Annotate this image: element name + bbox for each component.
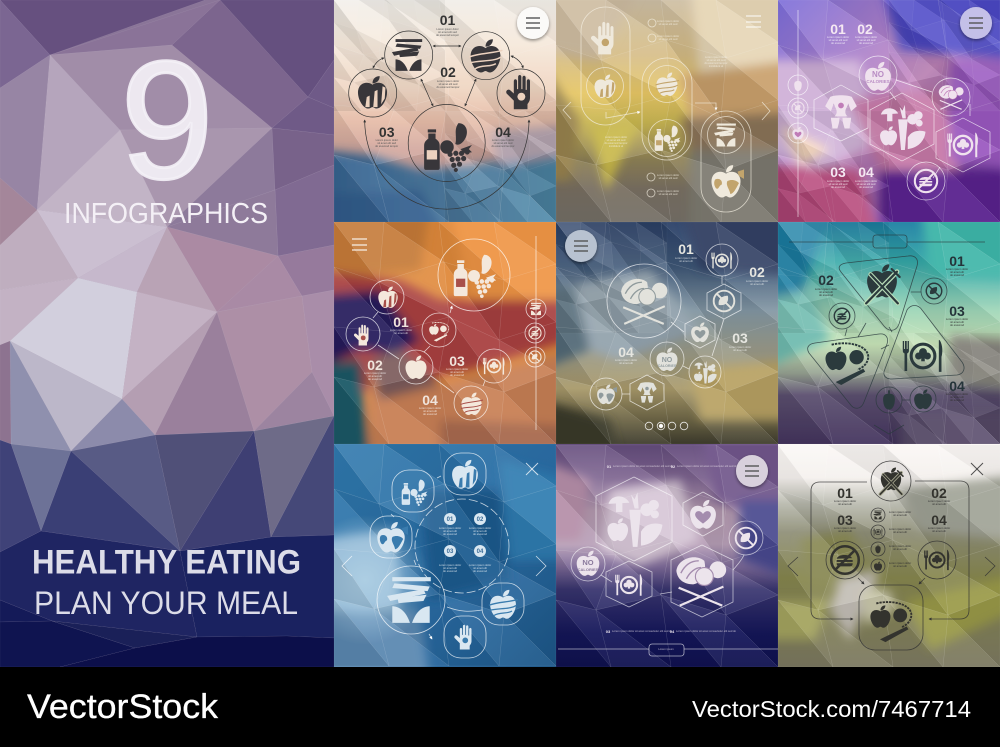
micro text: sit amet elit <box>619 361 633 365</box>
no calories label: CALORIES <box>578 567 599 572</box>
panel 4: orange and navy network diagram <box>334 222 556 444</box>
micro text: Lorem ipsum dolor sit amet consectetur elit sed do <box>613 464 674 468</box>
panel 8: purple and navy hexagon diagram <box>556 444 778 667</box>
node circles and connectors <box>346 236 546 430</box>
number badges: 02 <box>477 517 484 523</box>
micro text: Lorem ipsum dolor <box>855 179 877 183</box>
menu icon <box>746 16 761 27</box>
no calories label <box>866 70 890 84</box>
micro text: Lorem ipsum dolor <box>834 526 856 530</box>
heading: plan your meal: PLAN YOUR MEAL <box>34 585 298 621</box>
numbers: 01 <box>440 12 455 28</box>
panel 5: slate and tan diagram with pagination <box>556 222 778 444</box>
numbers: 04 <box>931 512 947 528</box>
micro text: Lorem ipsum dolor <box>946 392 968 396</box>
micro text: sit amet elit sed <box>659 37 678 41</box>
numbers: 03 <box>949 303 965 319</box>
micro text: Lorem ipsum dolor <box>834 499 856 503</box>
micro text blocks: Lorem ipsum dolor <box>436 27 459 31</box>
number badges <box>444 513 486 557</box>
diagram connectors <box>365 46 529 209</box>
no calories label: CALORIES <box>866 79 890 84</box>
numbers: 01 <box>678 241 694 257</box>
no calories label: CALORIES <box>658 364 677 368</box>
no calories label: NO <box>582 558 594 567</box>
micro text: do eiusmod tempor <box>704 61 728 65</box>
connecting shapes <box>788 10 990 217</box>
micro text: Lorem ipsum dolor <box>889 510 911 514</box>
micro text: sit amet elit <box>950 395 964 399</box>
frame and nodes <box>788 461 995 650</box>
micro text: do eiusmod <box>859 41 873 45</box>
numbers: 02 <box>440 64 456 80</box>
micro text: do eiusmod <box>473 569 487 573</box>
micro text: Lorem ipsum dolor <box>827 35 849 39</box>
micro text: sit amet elit <box>443 566 457 570</box>
row labels: 01 <box>607 464 612 469</box>
panel 1: light peach and blue radial diagram <box>334 0 556 222</box>
micro text <box>612 464 738 651</box>
micro text blocks: do eiusmod tempor <box>375 144 398 148</box>
micro text: Lorem ipsum dolor <box>746 279 768 283</box>
micro text: sit amet elit sed <box>829 182 848 186</box>
micro text: Lorem ipsum dolor <box>469 563 491 567</box>
micro text: Lorem ipsum dolor <box>615 358 637 362</box>
micro text: Lorem ipsum dolor <box>364 371 386 375</box>
micro text: sit amet elit <box>950 270 964 274</box>
image url: VectorStock.com/7467714 <box>692 696 971 722</box>
micro text: do eiusmod <box>859 185 873 189</box>
micro text blocks: do eiusmod tempor <box>436 33 459 37</box>
panel 2: golden yellow pill diagram <box>556 0 778 222</box>
micro text <box>604 19 728 196</box>
top bar, rounded triangles and nodes <box>789 235 985 434</box>
micro text: Lorem ipsum dolor <box>729 345 751 349</box>
icons <box>597 252 734 404</box>
micro text: Lorem ipsum dolor <box>815 287 837 291</box>
icons <box>591 22 744 198</box>
micro text <box>364 328 468 416</box>
menu button <box>736 455 768 487</box>
micro text: do eiusmod <box>443 532 457 536</box>
no calories label: NO <box>872 70 884 79</box>
no calories label: NO <box>662 357 673 364</box>
micro text: Lorem ipsum dolor <box>657 34 679 38</box>
micro text: sit amet elit <box>679 259 693 263</box>
micro text: Lorem ipsum dolor <box>657 173 679 177</box>
micro text: do eiusmod <box>819 293 833 297</box>
panel 9: white and olive framed diagram <box>778 444 1000 667</box>
micro text <box>439 526 491 573</box>
micro text: Lorem ipsum dolor <box>675 256 697 260</box>
micro text <box>815 267 968 402</box>
micro text: sit amet elit <box>750 282 764 286</box>
micro text: Lorem ipsum dolor <box>439 563 461 567</box>
row labels: 02 <box>671 464 676 469</box>
numbers <box>379 12 511 140</box>
micro text: sit amet elit <box>838 529 852 533</box>
pagination dots <box>645 422 688 430</box>
micro text: sit amet elit sed <box>659 192 678 196</box>
menu icon <box>352 239 367 250</box>
numbers: 03 <box>732 330 748 346</box>
micro text: Lorem ipsum dolor <box>946 267 968 271</box>
micro text: Lorem ipsum dolor <box>605 135 627 139</box>
micro text blocks <box>375 27 515 148</box>
icons <box>354 255 541 415</box>
micro text: incididunt ut <box>609 144 623 148</box>
micro text <box>827 35 877 189</box>
micro text blocks: Lorem ipsum dolor <box>376 138 398 142</box>
micro text: incididunt ut <box>709 64 723 68</box>
micro text blocks: Lorem ipsum dolor <box>492 138 514 142</box>
nodes <box>590 244 741 410</box>
micro text: sit amet elit <box>819 290 833 294</box>
numbers: 01 <box>949 253 965 269</box>
micro text blocks: sit amet elit sed <box>438 30 457 34</box>
micro text: sit amet elit <box>893 547 907 551</box>
micro text: sit amet elit <box>893 564 907 568</box>
number badges: 01 <box>447 517 454 523</box>
numbers: 01 <box>837 485 853 501</box>
micro text: sit amet elit sed <box>607 138 626 142</box>
no calories label <box>658 357 677 368</box>
micro text: do eiusmod <box>950 273 964 277</box>
micro text: do eiusmod tempor <box>604 141 628 145</box>
numbers: 03 <box>830 164 846 180</box>
numbers: 03 <box>449 353 465 369</box>
numbers: 02 <box>749 264 765 280</box>
big number 9: 9 <box>120 26 214 214</box>
micro text: do eiusmod <box>950 398 964 402</box>
micro text: sit amet elit <box>838 502 852 506</box>
nodes and lines <box>558 477 778 656</box>
icons <box>577 492 756 606</box>
micro text: sit amet elit <box>932 502 946 506</box>
icon row <box>358 39 530 172</box>
subtitle: infographics: INFOGRAPHICS <box>64 198 268 230</box>
numbers: 03 <box>837 512 853 528</box>
pills and circles <box>563 7 770 212</box>
footer watermark bar <box>0 667 1000 747</box>
micro text: sit amet elit <box>733 348 747 352</box>
micro text: Lorem ipsum dolor <box>928 526 950 530</box>
icons <box>826 264 942 410</box>
row labels: 04 <box>670 629 675 634</box>
micro text: sit amet elit sed <box>659 176 678 180</box>
panel 7: blue circular diagram <box>334 444 556 667</box>
micro text: sit amet elit sed <box>659 22 678 26</box>
micro text blocks: do eiusmod tempor <box>491 144 515 148</box>
micro text: Lorem ipsum dolor <box>889 527 911 531</box>
numbers: 04 <box>422 392 438 408</box>
numbers: 01 <box>830 21 846 37</box>
numbers: 01 <box>393 314 409 330</box>
micro text: Lorem ipsum dolor <box>889 561 911 565</box>
micro text: sit amet elit <box>893 513 907 517</box>
micro text: sit amet elit <box>450 370 464 374</box>
micro text: sit amet elit <box>443 529 457 533</box>
micro text: Lorem ipsum dolor <box>419 406 441 410</box>
heading: healthy eating: HEALTHY EATING <box>32 544 301 582</box>
micro text: Lorem ipsum dolor sit amet consectetur elit sed do <box>612 629 673 633</box>
micro text: do eiusmod <box>368 377 382 381</box>
micro text: Lorem ipsum dolor <box>657 189 679 193</box>
icons <box>831 468 949 642</box>
micro text: do eiusmod <box>831 41 845 45</box>
micro text <box>834 499 950 568</box>
menu button <box>960 7 992 39</box>
micro text: Lorem ipsum <box>658 647 675 651</box>
micro text: sit amet elit <box>893 530 907 534</box>
node: apple <box>349 31 545 182</box>
menu button <box>565 230 597 262</box>
numbers: 03 <box>379 124 395 140</box>
micro text: sit amet elit <box>473 529 487 533</box>
numbers <box>837 485 947 528</box>
numbers: 02 <box>931 485 947 501</box>
micro text: Lorem ipsum dolor sit amet consectetur elit sed do <box>677 464 738 468</box>
micro text <box>615 256 768 365</box>
numbers: 04 <box>858 164 874 180</box>
no calories label <box>578 558 599 572</box>
micro text: Lorem ipsum dolor <box>889 544 911 548</box>
micro text: do eiusmod <box>423 412 437 416</box>
micro text: sit amet elit sed <box>707 58 726 62</box>
micro text: sit amet elit <box>950 320 964 324</box>
micro text: sit amet elit sed <box>829 38 848 42</box>
micro text: sit amet elit <box>473 566 487 570</box>
micro text: Lorem ipsum dolor <box>855 35 877 39</box>
micro text blocks: sit amet elit sed <box>494 141 513 145</box>
micro text: sit amet elit sed <box>857 38 876 42</box>
numbers <box>367 314 465 408</box>
menu button <box>517 7 549 39</box>
micro text: sit amet elit <box>932 529 946 533</box>
micro text blocks: sit amet elit sed <box>377 141 397 145</box>
micro text: Lorem ipsum dolor <box>827 179 849 183</box>
micro text: Lorem ipsum dolor sit amet consectetur elit sed do <box>676 629 737 633</box>
micro text blocks: sit amet elit sed <box>439 82 458 86</box>
micro text blocks: Lorem ipsum dolor <box>437 79 459 83</box>
micro text: Lorem ipsum dolor <box>446 367 468 371</box>
brand name: VectorStock <box>27 688 219 726</box>
rings and connectors <box>342 453 546 658</box>
row labels: 03 <box>606 629 611 634</box>
micro text: Lorem ipsum dolor <box>928 499 950 503</box>
micro text blocks: do eiusmod tempor <box>436 85 460 89</box>
micro text: do eiusmod <box>473 532 487 536</box>
number badges: 03 <box>447 549 454 555</box>
micro text: sit amet elit sed <box>857 182 876 186</box>
micro text: do eiusmod <box>950 323 964 327</box>
micro text: Lorem ipsum dolor <box>657 19 679 23</box>
number badges: 04 <box>477 549 484 555</box>
micro text: Lorem ipsum dolor <box>390 328 412 332</box>
panel 3: violet and pink hexagon diagram <box>778 0 1000 222</box>
micro text: do eiusmod <box>443 569 457 573</box>
numbers: 04 <box>618 344 634 360</box>
micro text: Lorem ipsum dolor <box>705 55 727 59</box>
numbers <box>618 241 765 360</box>
micro text: Lorem ipsum dolor <box>439 526 461 530</box>
panel 6: teal and purple triangle diagram <box>778 222 1000 444</box>
icons <box>792 62 978 192</box>
numbers: 02 <box>857 21 873 37</box>
micro text: Lorem ipsum dolor <box>946 317 968 321</box>
micro text: do eiusmod <box>450 373 464 377</box>
micro text: sit amet elit <box>394 331 408 335</box>
micro text: sit amet elit <box>368 374 382 378</box>
numbers: 04 <box>949 378 965 394</box>
numbers <box>818 253 965 394</box>
micro text: sit amet elit <box>423 409 437 413</box>
row labels <box>606 464 676 634</box>
panel: cover with title <box>0 0 334 667</box>
polygon background <box>0 0 334 667</box>
icons <box>377 460 518 649</box>
micro text: Lorem ipsum dolor <box>469 526 491 530</box>
numbers: 04 <box>495 124 511 140</box>
numbers: 02 <box>818 272 834 288</box>
micro text: do eiusmod <box>831 185 845 189</box>
numbers: 02 <box>367 357 383 373</box>
numbers <box>830 21 874 180</box>
